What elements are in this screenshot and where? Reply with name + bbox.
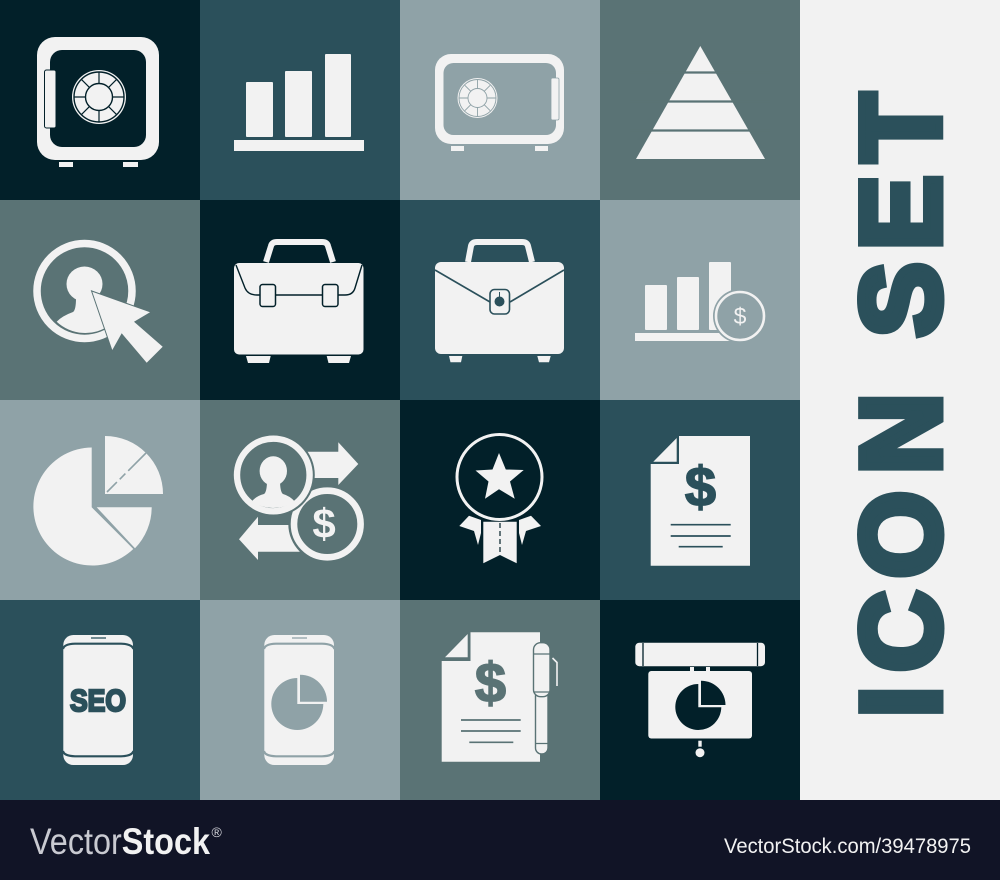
icon: user profile with cursor [37,244,163,363]
tile: wide safe square [400,0,600,200]
tile: SEO phone square [0,600,200,800]
registered mark: ® [212,824,222,840]
tile: medal square [400,400,600,600]
icon: dollar contract with pen [442,632,557,762]
tile: chart with coin square [600,200,800,400]
tile: pie chart square [0,400,200,600]
icon: square safe [37,37,159,167]
icon: user and dollar exchange: $ [312,500,336,547]
icon: bar chart with dollar coin [635,262,767,343]
icon: layered pyramid [630,46,770,159]
tile: vault safe square [0,0,200,200]
icon: wide safe [435,54,564,151]
icon: dollar contract with pen: $ [475,651,506,714]
icon: briefcase with buckles [234,242,364,363]
icon: dollar document: $ [685,455,716,518]
icon: briefcase with clasp [435,242,564,362]
tile: bar chart square [200,0,400,200]
tile: financial document square [600,400,800,600]
icon: smartphone with SEO: SEO [70,683,126,718]
icon: smartphone with SEO [63,635,134,765]
icon: bar chart [234,54,364,151]
tile: pyramid square [600,0,800,200]
icon: star medal with ribbon [455,432,544,563]
panel: title sidebar [800,0,1000,800]
tile: user and money exchange square [200,400,400,600]
logo: VectorStock: VectorStock [30,821,210,862]
image id: VectorStock.com/39478975 [724,834,971,858]
tile: user cursor square [0,200,200,400]
icon: user and dollar exchange [232,434,366,563]
footer bar [0,800,1000,880]
tile: phone pie chart square [200,600,400,800]
icon: presentation screen with pie chart [635,643,765,757]
icon: dollar document [651,436,750,566]
tile: envelope briefcase square [400,200,600,400]
icon: exploded pie chart [33,436,163,565]
icon: bar chart with dollar coin: $ [734,303,747,329]
icon: smartphone with pie chart [264,635,334,765]
tile: document and pen square [400,600,600,800]
title: ICON SET: ICON SET [838,93,963,717]
tile: briefcase with buckles square [200,200,400,400]
tile: projector square [600,600,800,800]
